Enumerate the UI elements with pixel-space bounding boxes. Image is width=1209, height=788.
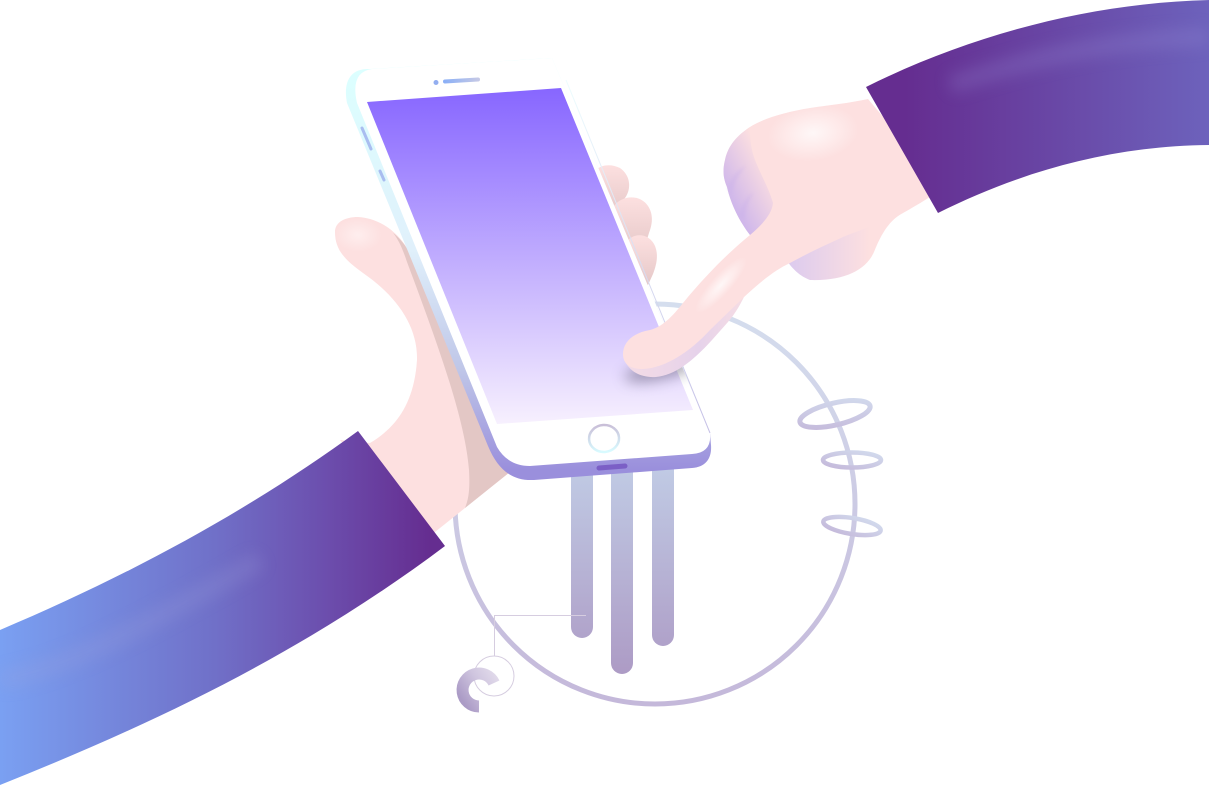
smartphone xyxy=(346,58,711,480)
thin right edge line xyxy=(566,80,710,433)
finger underside xyxy=(624,297,744,377)
screen xyxy=(367,88,693,424)
right hand pointing at screen xyxy=(623,99,945,386)
palm and thumb xyxy=(335,217,510,540)
right sleeve xyxy=(866,0,1209,213)
finger touch shadow xyxy=(620,364,688,390)
vertical bars below phone xyxy=(571,465,674,674)
fist knuckles shading xyxy=(724,127,773,235)
fingers behind phone xyxy=(590,165,657,285)
phone face xyxy=(355,58,710,466)
hand and finger xyxy=(623,99,945,369)
left sleeve xyxy=(0,431,445,785)
charging port xyxy=(599,466,625,468)
back of hand highlight xyxy=(764,99,862,167)
left hand xyxy=(334,217,510,540)
finger highlight xyxy=(689,251,753,319)
knuckle creases xyxy=(728,166,754,222)
home button xyxy=(588,424,620,453)
thumb highlight xyxy=(334,218,382,252)
large circle outline xyxy=(455,304,855,704)
lower palm xyxy=(785,190,930,280)
phone side edge xyxy=(346,58,711,480)
C-shaped arc xyxy=(463,674,494,706)
speaker and camera xyxy=(434,80,478,85)
rings on circle xyxy=(797,395,882,538)
thin connector line and small circle xyxy=(474,616,586,696)
side buttons xyxy=(362,128,384,180)
thumb shadow xyxy=(393,233,510,508)
